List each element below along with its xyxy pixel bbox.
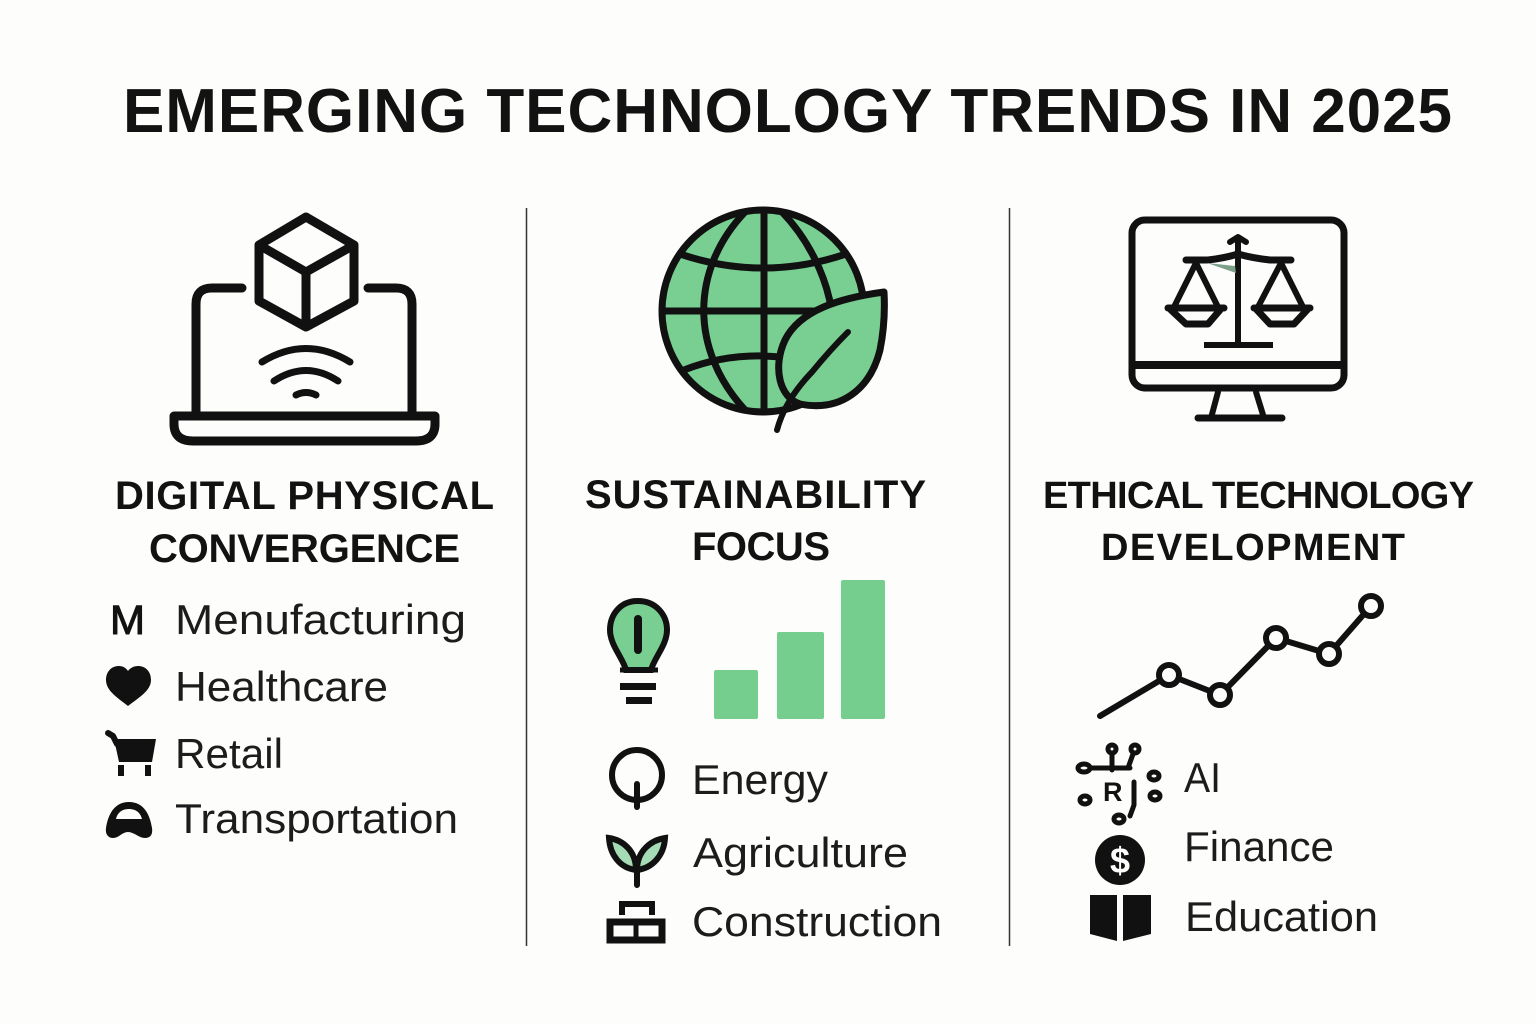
heading: sustainability focus: FOCUS	[692, 525, 830, 569]
heading: sustainability focus	[585, 473, 926, 569]
icon: laptop with cube and wifi	[174, 217, 435, 441]
list item: agriculture	[609, 829, 908, 885]
list item: ai: AI	[1184, 754, 1221, 801]
list item: education	[1090, 893, 1378, 941]
list item: manufacturing: M	[110, 597, 145, 643]
list item: agriculture: Agriculture	[693, 829, 908, 876]
heading: digital physical convergence	[115, 474, 494, 571]
list item: finance	[1095, 823, 1334, 885]
list item: healthcare: Healthcare	[175, 663, 388, 710]
list item: manufacturing: Menufacturing	[175, 596, 466, 643]
list item: retail	[108, 730, 283, 777]
heading: ethical technology development	[1043, 475, 1474, 569]
list item: finance: $	[1110, 840, 1130, 881]
panel: ethical technology development	[1043, 220, 1474, 941]
icon: globe with leaf	[662, 210, 884, 430]
list item: energy: Energy	[692, 756, 828, 803]
list item: finance: Finance	[1184, 823, 1334, 870]
line chart	[1100, 596, 1381, 716]
list item: retail: Retail	[175, 730, 283, 777]
list item: ai	[1078, 745, 1221, 823]
panel: digital physical convergence	[106, 217, 494, 842]
list item: construction: Construction	[692, 898, 942, 945]
list item: ai: R	[1103, 777, 1122, 807]
heading: sustainability focus: SUSTAINABILITY	[585, 473, 926, 517]
heading: digital physical convergence: DIGITAL PHYSICAL	[115, 474, 494, 518]
heading: ethical technology development: DEVELOPMENT	[1101, 527, 1405, 569]
heading: ethical technology development: ETHICAL TECHNOLOGY	[1043, 475, 1474, 517]
list item: transportation: Transportation	[175, 795, 458, 842]
icon: light bulb	[610, 601, 667, 704]
panel: sustainability focus	[585, 210, 942, 945]
icon: monitor with scales	[1132, 220, 1344, 418]
list item: education: Education	[1185, 893, 1378, 940]
title: EMERGING TECHNOLOGY TRENDS IN 2025	[123, 77, 1452, 146]
list item: energy	[612, 750, 828, 807]
bar chart	[714, 580, 885, 719]
heading: digital physical convergence: CONVERGENCE	[149, 527, 460, 571]
